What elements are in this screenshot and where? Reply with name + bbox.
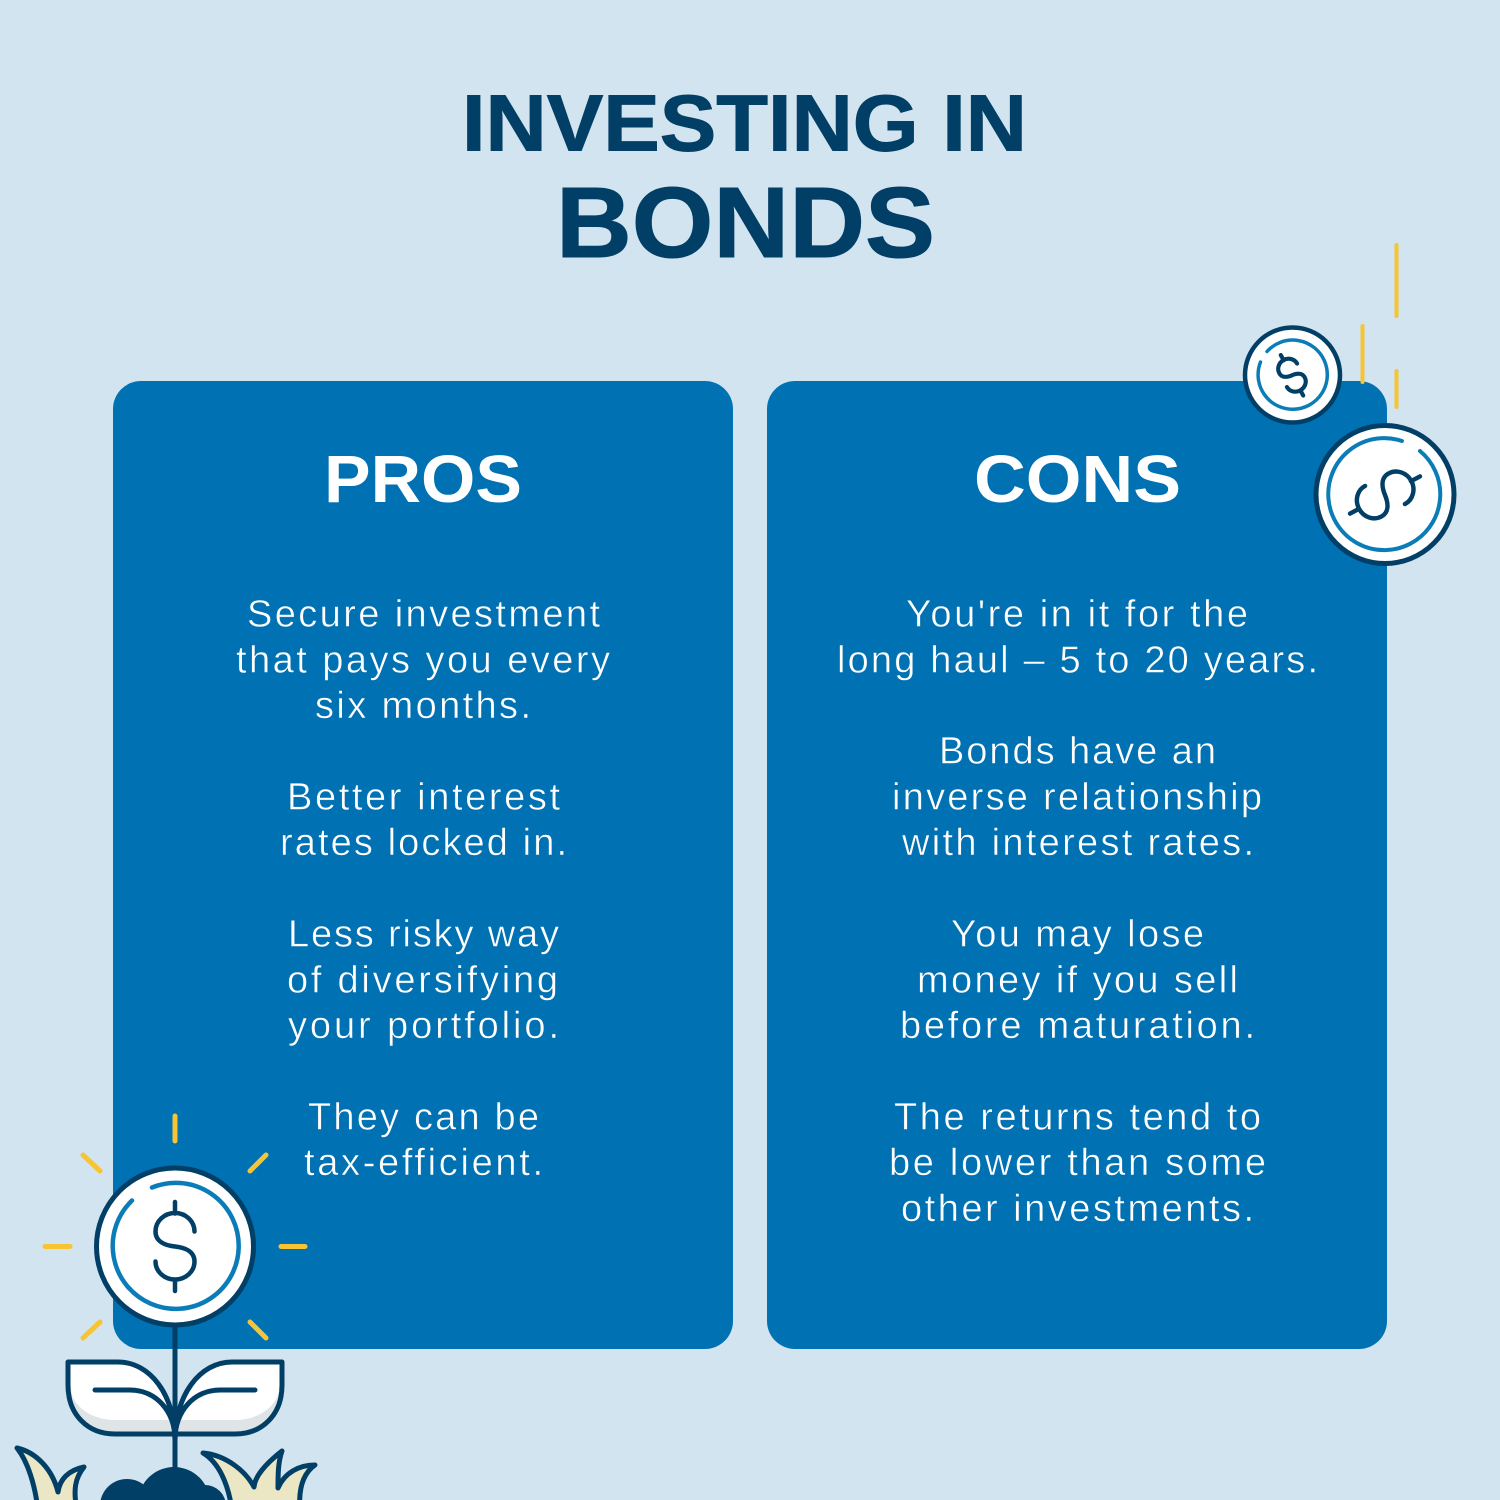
icon: light rays — [45, 1116, 305, 1338]
icon: small falling coin — [1245, 328, 1340, 422]
panel: pros — [113, 381, 733, 1349]
text block: cons list: The returns tend to — [894, 1096, 1261, 1138]
icon: left grass — [17, 1448, 84, 1500]
text block: pros list: of diversifying — [287, 960, 558, 1002]
heading: pros: PROS — [324, 442, 522, 517]
icon: dollar coin — [96, 1168, 254, 1325]
text block: pros list: six months. — [315, 685, 531, 727]
icon: falling motion lines — [1362, 245, 1396, 407]
icon: stem — [172, 1327, 178, 1480]
text block: pros list: tax-efficient. — [304, 1142, 543, 1184]
title — [462, 78, 1027, 279]
text block: cons list: Bonds have an — [939, 730, 1216, 772]
text block: pros list: Less risky way — [288, 914, 559, 956]
text block: pros list: Secure investment — [247, 594, 600, 636]
text block: cons list: other investments. — [901, 1188, 1254, 1230]
text block: cons list: You may lose — [951, 914, 1204, 956]
text block: pros list: rates locked in. — [280, 822, 567, 864]
text block: pros list: your portfolio. — [288, 1005, 559, 1047]
text block: pros list: that pays you every — [236, 640, 610, 682]
icon: large falling coin — [1316, 426, 1454, 564]
text block: cons list: before maturation. — [900, 1005, 1255, 1047]
icon: plant with dollar coin — [17, 1116, 315, 1500]
text block: cons list: long haul – 5 to 20 years. — [837, 640, 1318, 682]
text block: pros list: Better interest — [287, 776, 560, 818]
text block: cons list: be lower than some — [889, 1142, 1266, 1184]
text block: cons list: with interest rates. — [901, 822, 1254, 864]
text block: pros list: They can be — [308, 1096, 539, 1138]
title: BONDS — [556, 167, 935, 279]
text block: pros list — [236, 594, 610, 1184]
panel: cons — [767, 381, 1387, 1349]
text block: cons list: inverse relationship — [892, 776, 1262, 818]
text block: cons list: money if you sell — [917, 960, 1238, 1002]
text block: cons list — [837, 594, 1318, 1230]
heading: cons: CONS — [974, 442, 1181, 517]
title: INVESTING IN — [462, 78, 1027, 168]
text block: cons list: You're in it for the — [906, 594, 1248, 636]
icon: soil mound — [100, 1467, 226, 1500]
icon: right grass — [203, 1451, 315, 1500]
icon: leaves — [68, 1362, 282, 1440]
